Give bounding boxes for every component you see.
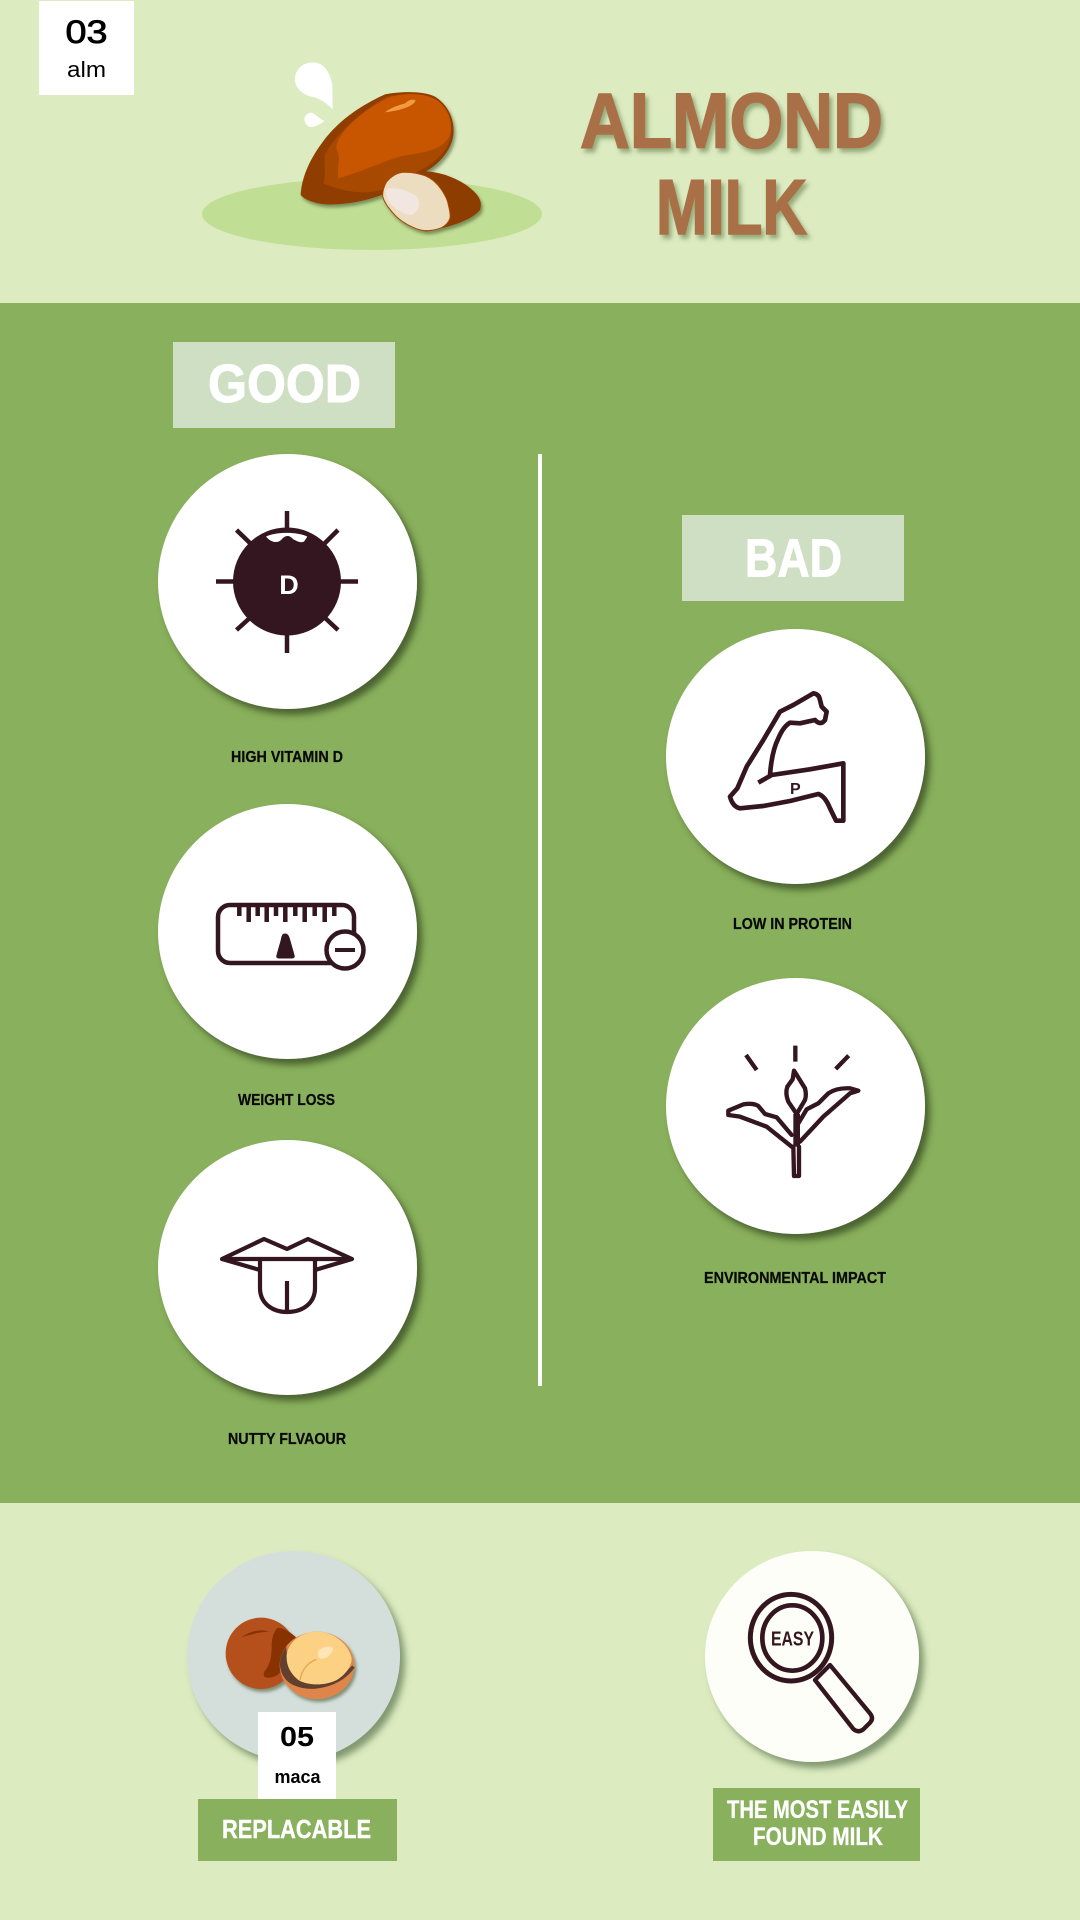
- panel: most easily found: [705, 1551, 920, 1861]
- icon circle: [666, 629, 925, 884]
- label box: [198, 1799, 397, 1861]
- circle: [705, 1551, 919, 1762]
- heading: good: [173, 342, 395, 428]
- label box: REPLACABLE: [222, 1814, 371, 1844]
- icon: magnifying glass: [750, 1594, 872, 1731]
- label: NUTTY FLVAOUR: [228, 1431, 346, 1448]
- tag 05 maca: maca: [274, 1767, 321, 1787]
- illustration: almonds on ground ellipse: [202, 62, 542, 250]
- icon: plant with rays: [728, 1046, 858, 1176]
- heading: bad: [682, 515, 904, 601]
- main green panel background: [0, 303, 1080, 1503]
- icon: vitamin d sun: [216, 511, 358, 653]
- icon: flexed arm: [730, 693, 843, 821]
- title: almond milk: MILK: [656, 163, 807, 251]
- label: LOW IN PROTEIN: [733, 916, 852, 933]
- tag 05 maca: [258, 1712, 336, 1799]
- panel: header tag 03 alm: [39, 1, 134, 95]
- icon circle: [158, 454, 417, 709]
- label: HIGH VITAMIN D: [231, 749, 343, 766]
- panel: header tag 03 alm: 03: [66, 14, 108, 50]
- icon circle: [158, 1140, 417, 1395]
- icon circle: [666, 978, 925, 1234]
- icon: flexed arm: P: [790, 781, 801, 798]
- icon: magnifying glass: EASY: [771, 1628, 814, 1650]
- benefit: high vitamin d: [158, 454, 417, 766]
- icon: vitamin d sun: D: [279, 570, 299, 600]
- label box: [713, 1788, 920, 1861]
- header background: [0, 0, 1080, 303]
- icon circle: [158, 804, 417, 1059]
- icon: measuring tape with minus: [218, 905, 364, 968]
- tag 05 maca: 05: [280, 1721, 314, 1752]
- label box: FOUND MILK: [753, 1823, 883, 1851]
- label: WEIGHT LOSS: [238, 1092, 335, 1109]
- footer background: [0, 1503, 1080, 1920]
- divider line: [538, 454, 542, 1386]
- drawback: environmental impact: [666, 978, 925, 1287]
- benefit: nutty flavour: [158, 1140, 417, 1448]
- heading: bad: BAD: [745, 528, 842, 588]
- label: ENVIRONMENTAL IMPACT: [704, 1270, 886, 1287]
- panel: replacable: [187, 1551, 400, 1861]
- title: almond milk: ALMOND: [580, 76, 883, 164]
- panel: header tag 03 alm: alm: [67, 57, 106, 82]
- drawback: low in protein: [666, 629, 925, 933]
- icon: macadamia nuts: [226, 1618, 354, 1699]
- icon: lips and tongue: [222, 1239, 352, 1312]
- label box: THE MOST EASILY: [727, 1796, 908, 1824]
- circle: [187, 1551, 400, 1761]
- heading: good: GOOD: [208, 354, 361, 414]
- benefit: weight loss: [158, 804, 417, 1109]
- title: almond milk: [580, 76, 883, 251]
